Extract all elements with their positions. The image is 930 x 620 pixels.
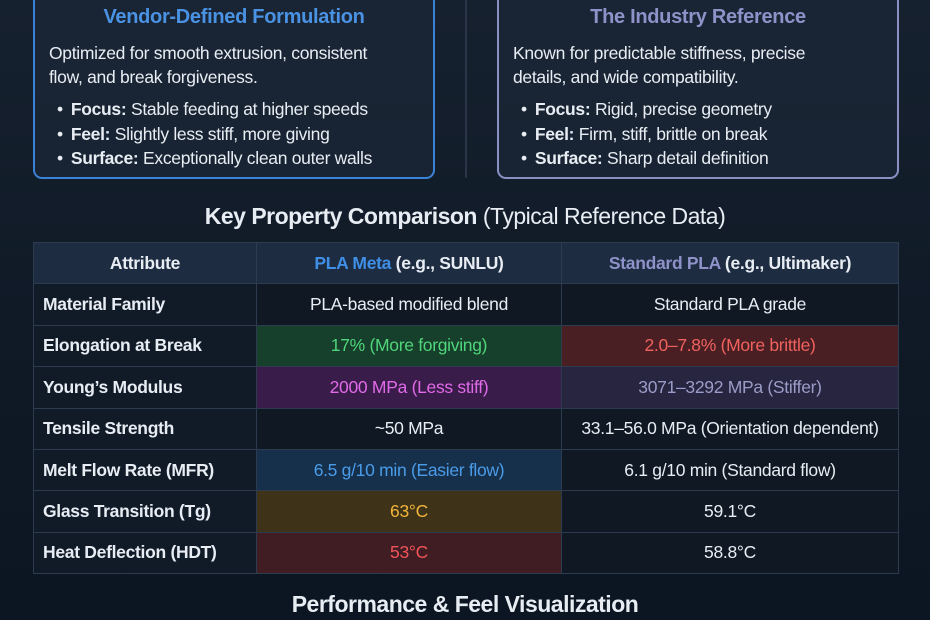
table: property comparison: 53°C <box>390 542 428 562</box>
table: property comparison: ~50 MPa <box>375 418 443 438</box>
heading: performance visualization: Performance & Feel Visualization <box>292 591 638 617</box>
table: property comparison: 63°C <box>390 501 428 521</box>
table: property comparison: 3071–3292 MPa (Stiffer) <box>638 377 822 397</box>
table: property comparison: 33.1–56.0 MPa (Orientation dependent) <box>581 418 879 438</box>
list: vendor bullets <box>58 99 372 168</box>
list: vendor bullets: Feel: Slightly less stiff, more giving <box>71 124 330 144</box>
list: industry bullets <box>522 99 772 168</box>
list: vendor bullets: Focus: Stable feeding at higher speeds <box>71 99 368 119</box>
table: property comparison: Young’s Modulus <box>43 377 182 397</box>
table: property comparison: PLA Meta (e.g., SUNLU) <box>314 253 504 273</box>
table: property comparison: Attribute <box>110 253 180 273</box>
table: property comparison: Heat Deflection (HDT) <box>43 542 217 562</box>
text: industry description: Known for predictable stiffness, precise details, and wide compatibility. <box>513 43 805 87</box>
divider <box>465 0 467 178</box>
table: property comparison: Melt Flow Rate (MFR) <box>43 460 214 480</box>
list: industry bullets: Surface: Sharp detail definition <box>535 148 768 168</box>
heading: vendor: Vendor-Defined Formulation <box>103 6 365 28</box>
table: property comparison: Standard PLA grade <box>654 294 806 314</box>
table: property comparison: 2000 MPa (Less stiff) <box>330 377 488 397</box>
table: property comparison: Standard PLA (e.g., Ultimaker) <box>609 253 851 273</box>
list: industry bullets: Feel: Firm, stiff, brittle on break <box>535 124 767 144</box>
heading: key property comparison: Key Property Comparison (Typical Reference Data) <box>205 203 725 229</box>
table: property comparison: 6.5 g/10 min (Easier flow) <box>314 460 504 480</box>
list: vendor bullets: Surface: Exceptionally clean outer walls <box>71 148 372 168</box>
table: property comparison: Glass Transition (Tg) <box>43 501 211 521</box>
table: property comparison: 6.1 g/10 min (Standard flow) <box>624 460 836 480</box>
panel: vendor-defined formulation <box>33 0 435 179</box>
table: property comparison: 17% (More forgiving) <box>331 335 487 355</box>
table: property comparison: PLA-based modified blend <box>310 294 508 314</box>
table: property comparison: Tensile Strength <box>43 418 174 438</box>
table: property comparison: 59.1°C <box>704 501 756 521</box>
panel: industry reference <box>497 0 899 179</box>
table: property comparison: Material Family <box>43 294 165 314</box>
table: property comparison: 58.8°C <box>704 542 756 562</box>
text: vendor description: Optimized for smooth extrusion, consistent flow, and break forgiveness. <box>49 43 367 87</box>
list: industry bullets: Focus: Rigid, precise geometry <box>535 99 772 119</box>
table: property comparison: 2.0–7.8% (More brittle) <box>644 335 816 355</box>
table: property comparison <box>33 242 899 574</box>
table: property comparison: Elongation at Break <box>43 335 202 355</box>
heading: industry: The Industry Reference <box>590 6 806 28</box>
